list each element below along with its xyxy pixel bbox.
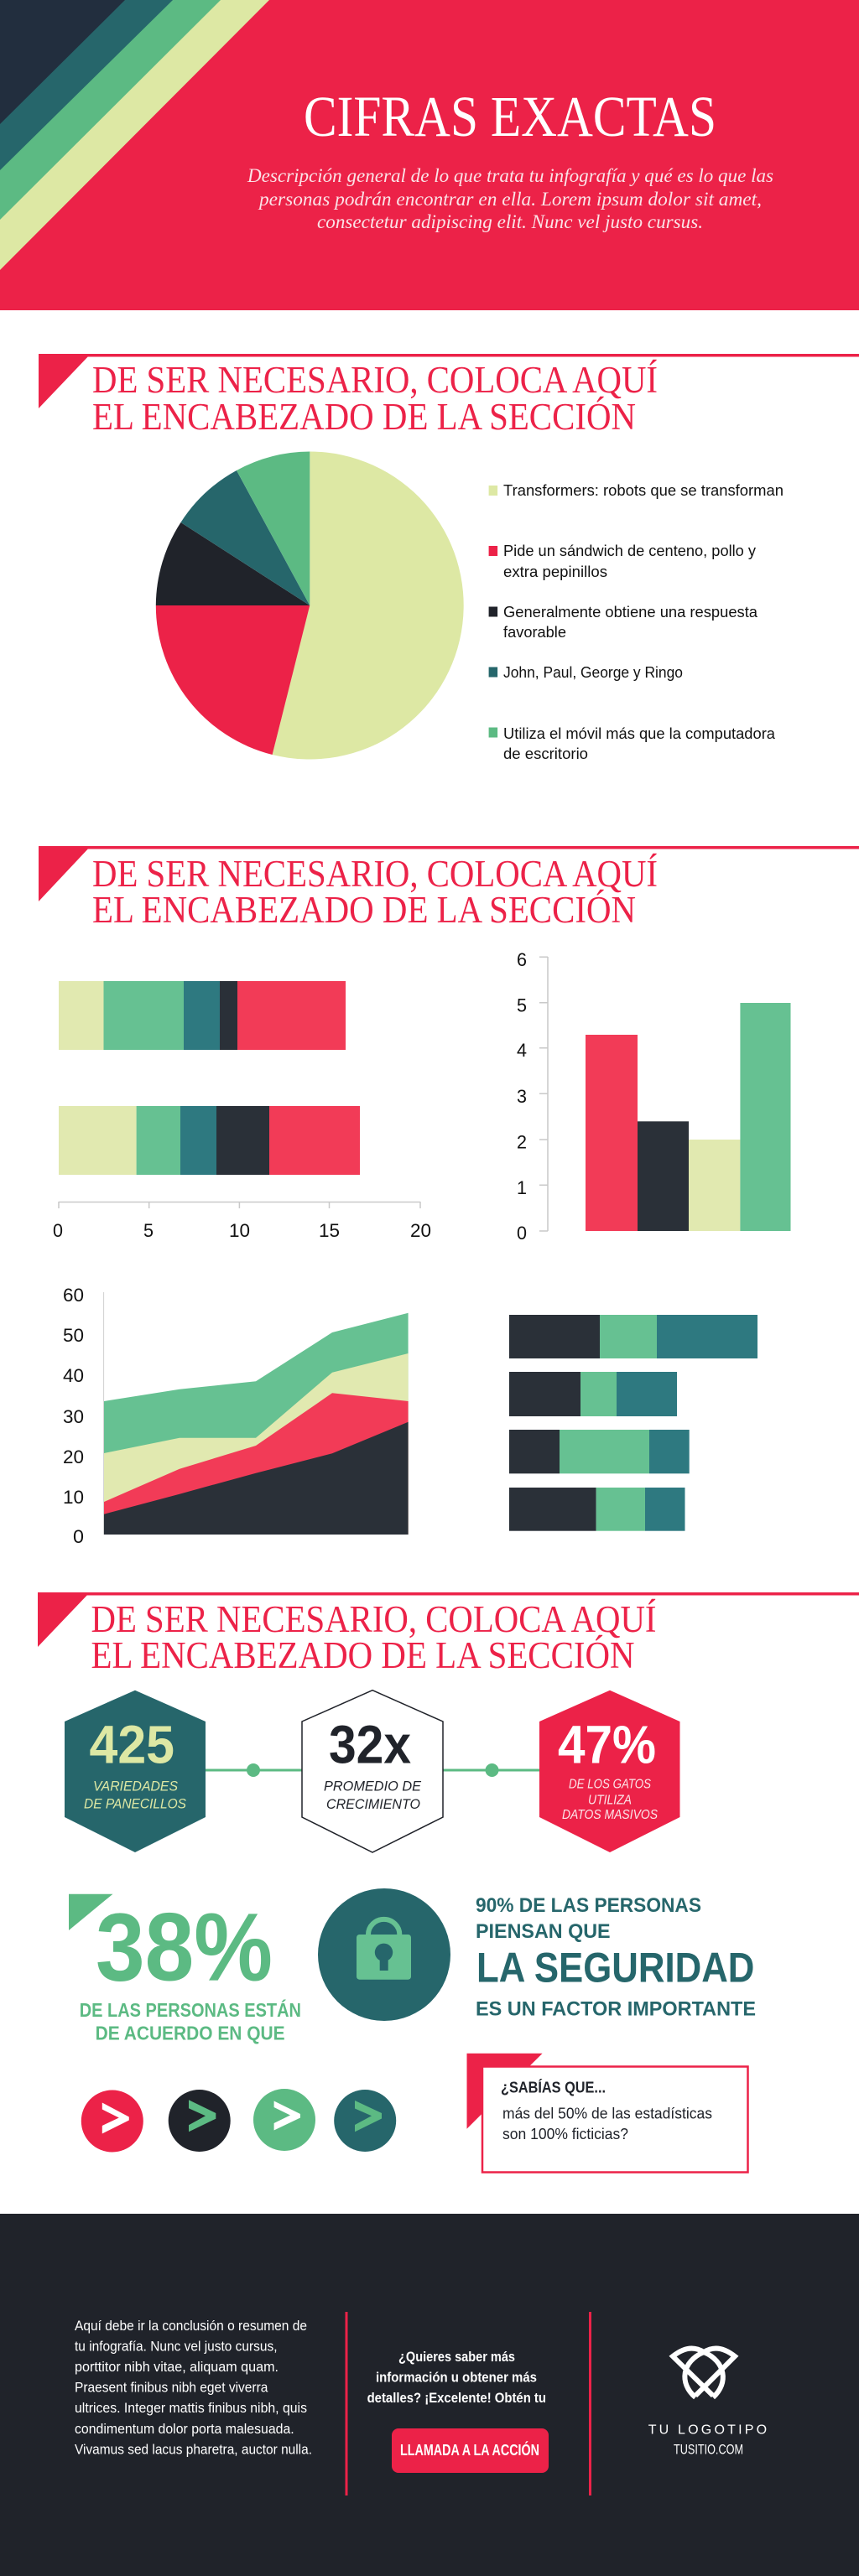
conclusion text: condimentum dolor porta malesuada. [75, 2421, 294, 2437]
hexagon: 47% cats: DE LOS GATOS [569, 1778, 651, 1792]
call to action text: ¿Quieres saber más [398, 2349, 515, 2365]
stacked area chart: 60 [63, 1285, 84, 1306]
hexagon: 32x growth: 32x [329, 1714, 411, 1774]
stat: 38%: DE ACUERDO EN QUE [96, 2023, 285, 2044]
horizontal stacked bar chart: 20 [410, 1220, 431, 1241]
horizontal stacked bar chart [53, 981, 431, 1241]
stacked area chart: 40 [63, 1365, 84, 1386]
hexagon: 425 varieties: DE PANECILLOS [84, 1796, 187, 1812]
column chart: 0 [517, 1223, 527, 1244]
column chart: 2 [517, 1132, 527, 1152]
icon: logo mark [673, 2349, 735, 2397]
hexagon: 425 varieties: VARIEDADES [93, 1779, 179, 1794]
connector lines with dots [206, 1763, 539, 1777]
callout: did you know: son 100% ficticias? [502, 2126, 628, 2142]
horizontal stacked bar chart: 0 [53, 1220, 63, 1241]
horizontal stacked bar chart: 15 [319, 1220, 340, 1241]
hexagon: 47% cats: UTILIZA [588, 1794, 632, 1808]
stacked area chart: 30 [63, 1406, 84, 1427]
stacked area chart: 20 [63, 1446, 84, 1467]
description: consectetur adipiscing elit. Nunc vel justo cursus. [317, 211, 703, 232]
column chart: 3 [517, 1086, 527, 1107]
pie legend [489, 482, 784, 762]
conclusion text: Aquí debe ir la conclusión o resumen de [75, 2318, 307, 2334]
website: TUSITIO.COM [674, 2442, 743, 2458]
call to action text: detalles? ¡Excelente! Obtén tu [367, 2390, 546, 2406]
conclusion text: porttitor nibh vitae, aliquam quam. [75, 2359, 279, 2375]
icon row: chevron circles [81, 2089, 396, 2152]
panel: footer [0, 2214, 859, 2576]
section heading 2: DE SER NECESARIO, COLOCA AQUÍ [92, 853, 658, 895]
call to action button: LLAMADA A LA ACCIÓN [400, 2441, 539, 2459]
pie legend: de escritorio [503, 745, 588, 762]
section heading 3: EL ENCABEZADO DE LA SECCIÓN [91, 1634, 634, 1676]
callout: did you know [466, 2054, 748, 2172]
hexagon: 47% cats: DATOS MASIVOS [562, 1808, 658, 1822]
hexagon: 47% cats [539, 1690, 679, 1852]
logo wordmark: TU LOGOTIPO [648, 2423, 769, 2438]
section heading 3 [38, 1592, 859, 1676]
stacked area chart: 0 [73, 1526, 84, 1547]
conclusion text: Praesent finibus nibh eget viverra [75, 2380, 268, 2396]
stacked area chart [63, 1285, 409, 1547]
decorative diagonal stripes [0, 0, 269, 270]
hexagon: 32x growth: PROMEDIO DE [324, 1779, 422, 1794]
conclusion text: Vivamus sed lacus pharetra, auctor nulla. [75, 2442, 312, 2458]
call to action text: información u obtener más [376, 2370, 537, 2386]
column chart: 6 [517, 949, 527, 970]
stat: security text: LA SEGURIDAD [476, 1944, 754, 1991]
section heading 2: EL ENCABEZADO DE LA SECCIÓN [92, 889, 636, 931]
description [247, 165, 773, 232]
pie legend: favorable [503, 624, 566, 641]
stacked bars without axis [509, 1315, 757, 1531]
hexagon: 425 varieties: 425 [89, 1714, 174, 1774]
callout: did you know: más del 50% de las estadísticas [502, 2106, 712, 2122]
pie legend: extra pepinillos [503, 564, 607, 580]
section heading 1: DE SER NECESARIO, COLOCA AQUÍ [92, 359, 658, 401]
section heading 2 [39, 846, 859, 931]
icon: padlock in circle [318, 1888, 450, 2021]
section heading 1: EL ENCABEZADO DE LA SECCIÓN [92, 396, 636, 438]
panel: header banner [0, 0, 859, 310]
footer dividers [346, 2312, 591, 2496]
stat: security text: 90% DE LAS PERSONAS [476, 1894, 701, 1917]
description: Descripción general de lo que trata tu infografía y qué es lo que las [247, 165, 773, 186]
pie legend: Utiliza el móvil más que la computadora [503, 725, 776, 742]
callout: did you know: ¿SABÍAS QUE... [501, 2079, 606, 2096]
stacked area chart: 10 [63, 1487, 84, 1508]
hexagon: 32x growth [302, 1690, 443, 1852]
hexagon: 32x growth: CRECIMIENTO [326, 1796, 420, 1812]
stat: 38%: 38% [96, 1894, 273, 2002]
pie legend: John, Paul, George y Ringo [503, 664, 683, 681]
column chart [517, 949, 790, 1244]
conclusion text [75, 2318, 312, 2458]
pie legend: Pide un sándwich de centeno, pollo y [503, 543, 756, 559]
column chart: 5 [517, 995, 527, 1016]
description: personas podrán encontrar en ella. Lorem ipsum dolor sit amet, [258, 189, 762, 210]
stat: 38%: DE LAS PERSONAS ESTÁN [80, 1998, 301, 2021]
pie legend: Generalmente obtiene una respuesta [503, 604, 758, 621]
stat: security text: ES UN FACTOR IMPORTANTE [476, 1997, 756, 2020]
column chart: 1 [517, 1177, 527, 1198]
conclusion text: ultrices. Integer mattis finibus nibh, quis [75, 2400, 307, 2416]
column chart: 4 [517, 1040, 527, 1061]
stacked area chart: 50 [63, 1325, 84, 1346]
call to action text [367, 2349, 546, 2406]
pie chart [156, 451, 464, 759]
stat: 38% [69, 1894, 301, 2044]
horizontal stacked bar chart: 5 [143, 1220, 154, 1241]
hexagon: 425 varieties [65, 1690, 206, 1852]
stat: security text [476, 1894, 756, 2020]
call to action button [392, 2428, 549, 2473]
conclusion text: tu infografía. Nunc vel justo cursus, [75, 2339, 277, 2355]
horizontal stacked bar chart: 10 [229, 1220, 250, 1241]
hexagon: 47% cats: 47% [558, 1714, 656, 1774]
section heading 3: DE SER NECESARIO, COLOCA AQUÍ [91, 1598, 656, 1640]
title: CIFRAS EXACTAS [304, 85, 716, 148]
section heading 1 [39, 354, 859, 438]
stat: security text: PIENSAN QUE [476, 1920, 611, 1943]
pie legend: Transformers: robots que se transforman [503, 482, 784, 499]
